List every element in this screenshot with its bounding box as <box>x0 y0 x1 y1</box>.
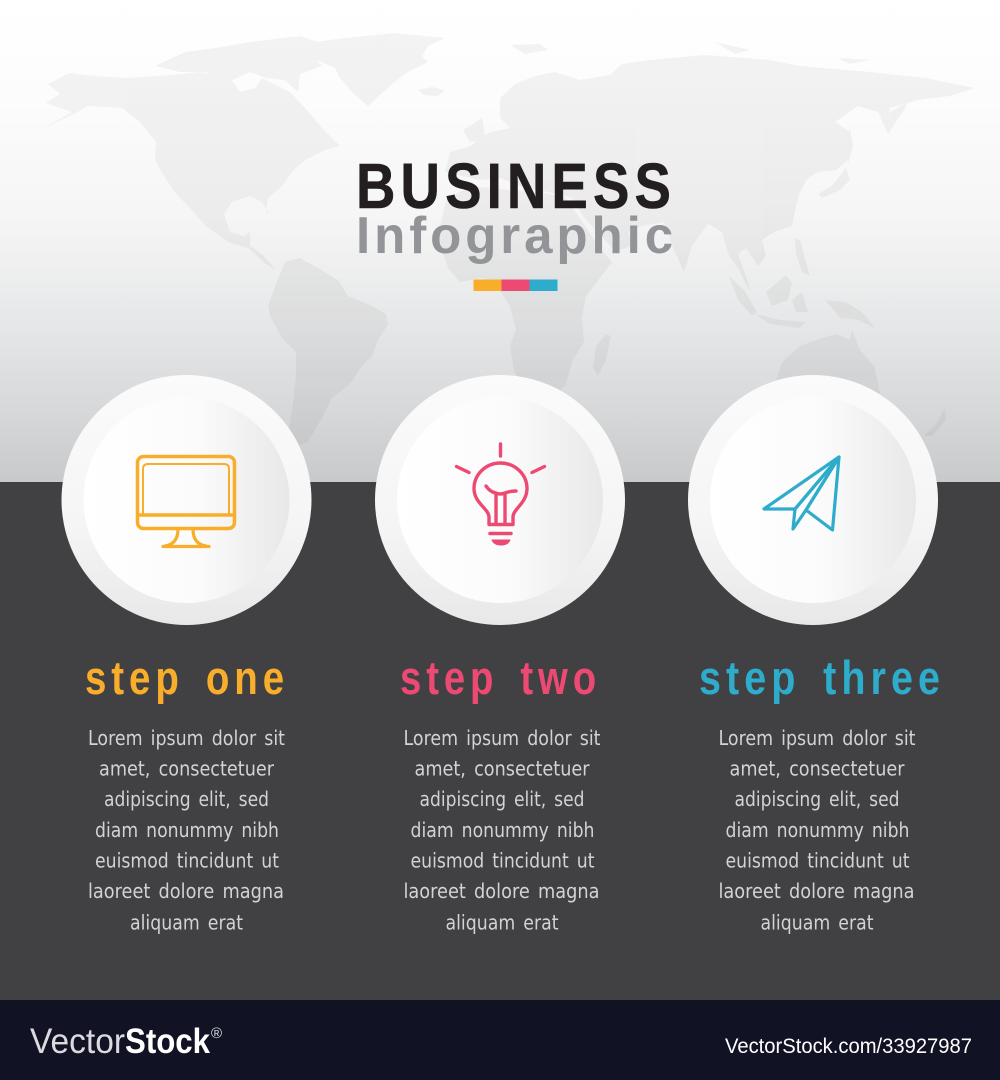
title: BUSINESS: BUSINESS <box>356 150 676 222</box>
text block: step three: euismod tincidunt ut <box>726 848 910 872</box>
text block: step two: aliquam erat <box>446 910 558 934</box>
text block: step one: Lorem ipsum dolor sit <box>88 726 285 750</box>
text block: step three: Lorem ipsum dolor sit <box>718 726 916 750</box>
text block: step one: adipiscing elit, sed <box>104 787 269 811</box>
text block: step two: laoreet dolore magna <box>404 879 600 903</box>
panel: step one <box>62 375 312 934</box>
footer logo: VectorStock <box>30 1022 222 1061</box>
heading: step two: step two <box>400 651 601 704</box>
heading: step three: step three <box>699 651 945 704</box>
text block: step one <box>88 726 285 934</box>
circle badge three <box>688 375 938 625</box>
text block: step one: laoreet dolore magna <box>88 879 284 903</box>
panel: step three <box>688 375 945 934</box>
text block: step two: amet, consectetuer <box>414 756 590 780</box>
footer logo: VectorStock: Stock <box>125 1022 210 1061</box>
circle badge two <box>375 375 625 625</box>
text block: step two: diam nonummy nibh <box>410 818 594 842</box>
subtitle: Infographic: Infographic <box>356 207 677 265</box>
text block: step three <box>718 726 916 934</box>
icon: desktop monitor <box>138 456 234 546</box>
footer bar <box>0 1000 1000 1080</box>
dark content panel <box>0 482 1000 1000</box>
text block: step three: adipiscing elit, sed <box>734 787 900 811</box>
text block: step three: diam nonummy nibh <box>726 818 910 842</box>
text block: step three: laoreet dolore magna <box>718 879 914 903</box>
text block: step two: euismod tincidunt ut <box>410 848 594 872</box>
footer logo: VectorStock: ® <box>211 1025 222 1042</box>
text block: step two: adipiscing elit, sed <box>420 787 584 811</box>
text block: step one: aliquam erat <box>130 910 243 934</box>
text block: step three: amet, consectetuer <box>730 756 905 780</box>
text block: step one: diam nonummy nibh <box>95 818 279 842</box>
circle badge one <box>62 375 312 625</box>
text block: step two <box>404 726 600 934</box>
text block: step one: amet, consectetuer <box>99 756 274 780</box>
colour accent bar <box>474 280 558 291</box>
footer logo: VectorStock: Vector <box>30 1022 125 1061</box>
text block: step one: euismod tincidunt ut <box>95 848 279 872</box>
footer image id: VectorStock.com/33927987 <box>725 1035 972 1058</box>
icon: light bulb <box>456 444 544 545</box>
icon: paper plane <box>764 457 839 530</box>
world map <box>40 33 975 447</box>
background gradient panel <box>0 0 1000 483</box>
text block: step three: aliquam erat <box>760 910 874 934</box>
text block: step two: Lorem ipsum dolor sit <box>404 726 600 750</box>
panel: step two <box>375 375 625 934</box>
heading: step one: step one <box>85 651 289 704</box>
